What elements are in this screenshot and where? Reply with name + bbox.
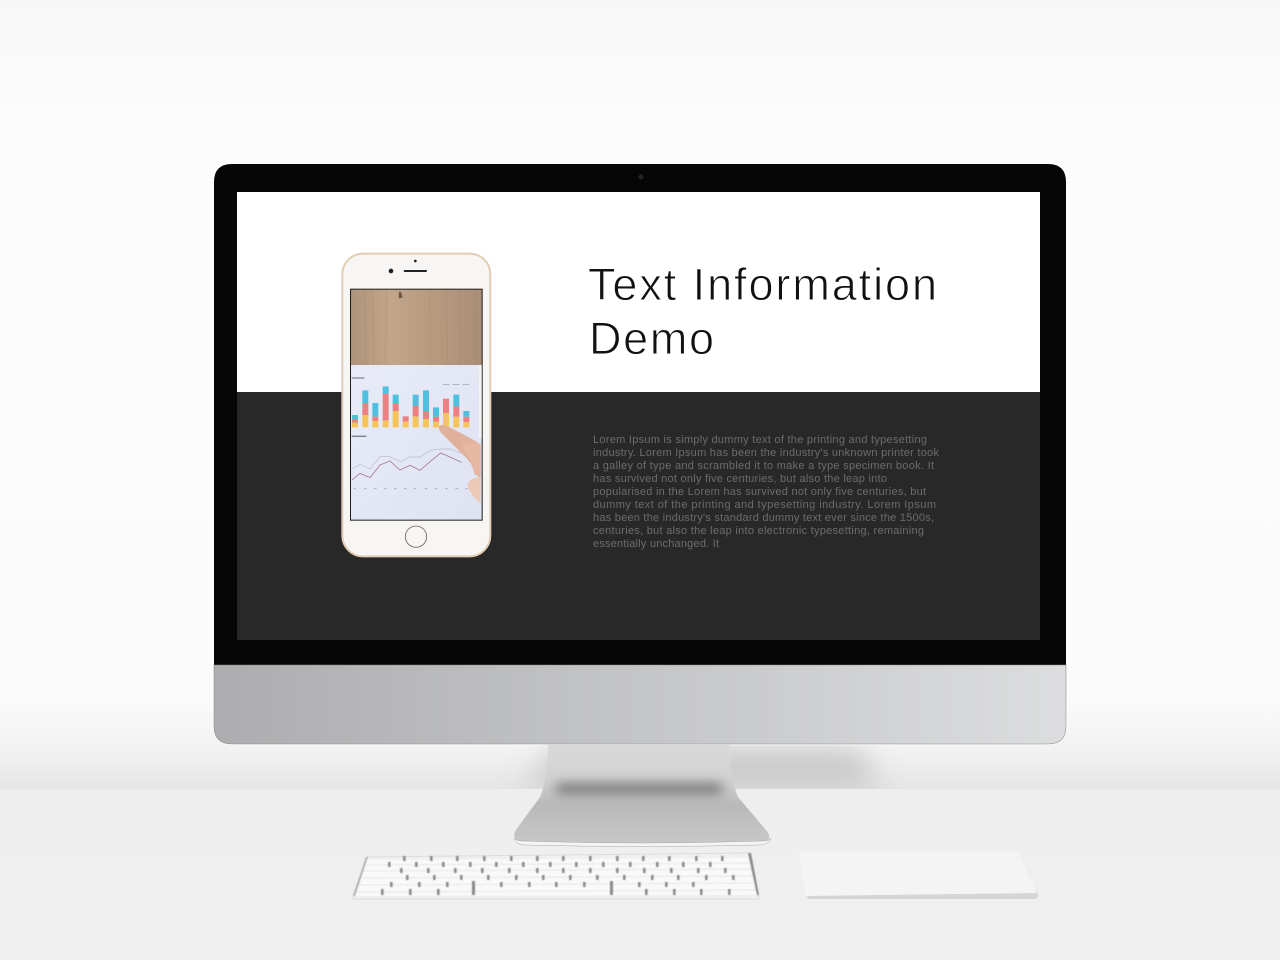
stacked bar chart bbox=[352, 377, 469, 437]
trackpad bbox=[798, 853, 1038, 899]
monitor chin bbox=[214, 665, 1066, 744]
line chart bbox=[352, 449, 468, 489]
title line 1: Text Information bbox=[588, 259, 937, 310]
body text: popularised in the Lorem has survived not only five centuries, but bbox=[593, 486, 926, 498]
bars yellow bbox=[352, 411, 469, 427]
bars red bbox=[352, 394, 469, 423]
phone camera bbox=[414, 260, 417, 262]
phone body bbox=[342, 254, 490, 556]
screen top bbox=[237, 192, 1040, 392]
wood photo bbox=[351, 290, 482, 366]
body text: essentially unchanged. It bbox=[593, 538, 719, 550]
keyboard key gaps bbox=[353, 853, 759, 896]
axis ticks bbox=[353, 487, 468, 490]
body text: a galley of type and scrambled it to make a type specimen book. It bbox=[593, 460, 934, 472]
monitor bbox=[212, 162, 1068, 746]
trackpad edge bbox=[806, 890, 1038, 899]
chart legend bbox=[443, 383, 469, 386]
right strip bbox=[479, 365, 482, 438]
title bbox=[588, 259, 937, 364]
monitor glow edge bbox=[212, 162, 1068, 746]
monitor bezel bbox=[214, 164, 1066, 665]
paper sheet bbox=[351, 365, 482, 520]
keyboard bbox=[353, 853, 759, 899]
phone home button bbox=[405, 526, 427, 547]
monitor mockup scene bbox=[0, 162, 1280, 900]
webcam bbox=[638, 174, 644, 180]
trackpad surface bbox=[798, 853, 1037, 896]
keyboard body bbox=[353, 853, 759, 899]
body text: centuries, but also the leap into electronic typesetting, remaining bbox=[593, 525, 924, 537]
hand main finger bbox=[439, 425, 481, 478]
stand shadow band bbox=[556, 784, 722, 793]
line purple bbox=[352, 453, 462, 480]
chart heading bbox=[352, 377, 366, 437]
phone speaker bbox=[404, 270, 427, 272]
screen bottom bbox=[237, 392, 1040, 640]
stand bbox=[514, 744, 771, 846]
desk surface bbox=[0, 789, 1280, 960]
monitor shadow on wall bbox=[520, 746, 880, 789]
hand palm shade bbox=[462, 442, 481, 475]
phone bbox=[342, 254, 490, 556]
body text: dummy text of the printing and typesetting industry. Lorem Ipsum bbox=[593, 499, 936, 511]
keyboard key rows bbox=[355, 858, 758, 896]
phone sensor bbox=[389, 269, 393, 273]
phone screen frame bbox=[350, 289, 483, 521]
hand bbox=[439, 425, 481, 502]
body text: Lorem Ipsum is simply dummy text of the printing and typesetting bbox=[593, 434, 927, 446]
body text: has survived not only five centuries, but also the leap into bbox=[593, 473, 887, 485]
hand second finger bbox=[468, 477, 481, 502]
body text: industry. Lorem Ipsum has been the industry's unknown printer took bbox=[593, 447, 940, 459]
stand base edge bbox=[514, 838, 771, 846]
desk surface repaint under shadow bbox=[400, 789, 1000, 819]
title line 2: Demo bbox=[589, 313, 714, 364]
stand body bbox=[514, 744, 769, 844]
body text bbox=[593, 434, 940, 550]
body text: has been the industry's standard dummy text ever since the 1500s, bbox=[593, 512, 934, 524]
line grey bbox=[352, 449, 462, 469]
bars blue bbox=[352, 386, 469, 419]
